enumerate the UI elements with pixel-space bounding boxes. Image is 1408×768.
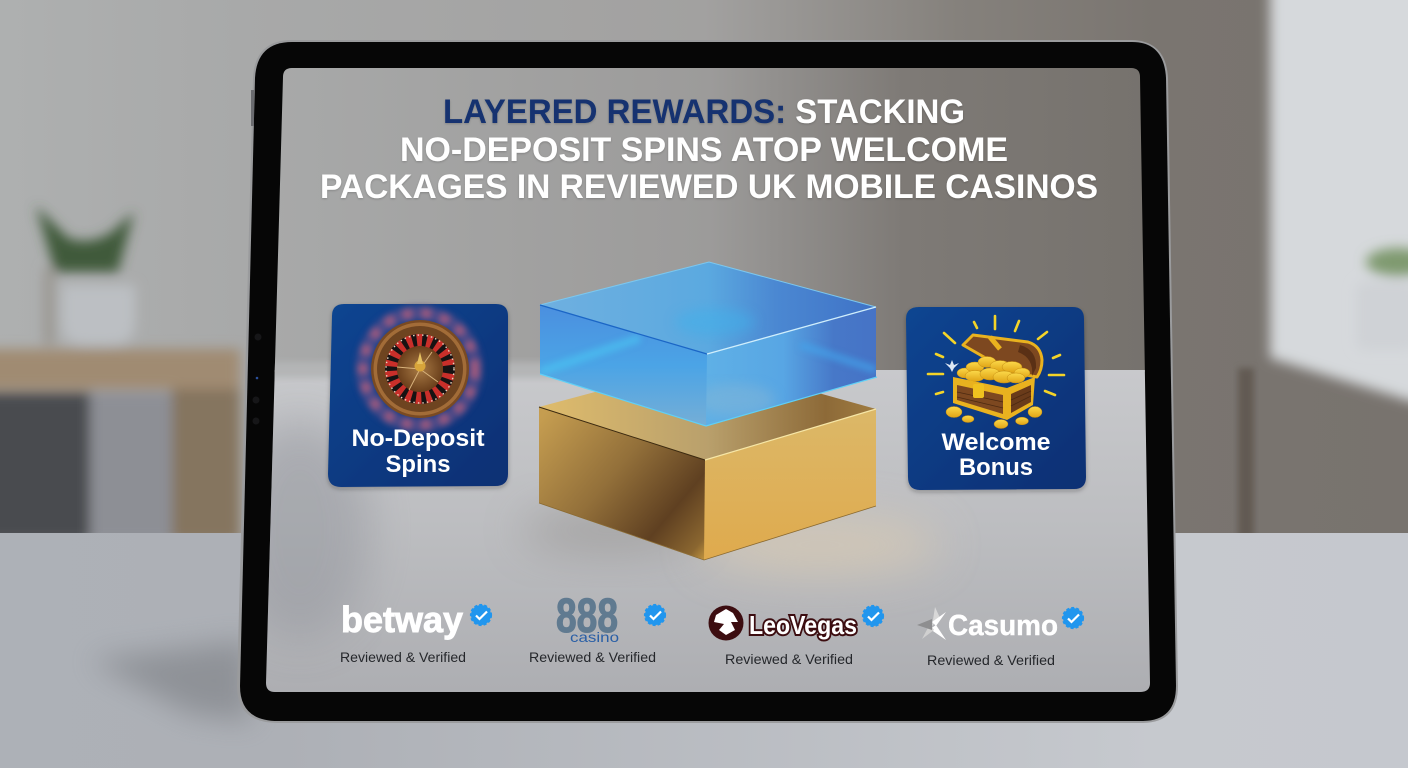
card label — [352, 425, 484, 478]
right plant — [1360, 240, 1408, 286]
brand: Casumo: Casumo — [948, 610, 1058, 642]
title — [320, 93, 1098, 206]
title: NO-DEPOSIT SPINS ATOP WELCOME — [400, 131, 1008, 169]
brand: Casumo — [917, 607, 1083, 668]
title: PACKAGES IN REVIEWED UK MOBILE CASINOS — [320, 168, 1098, 206]
translucent blue block — [540, 262, 877, 426]
card: no-deposit spins — [328, 304, 508, 487]
brand: LeoVegas — [708, 606, 883, 667]
card label: Spins — [386, 451, 450, 478]
brand: LeoVegas: Reviewed & Verified — [725, 652, 853, 667]
brand: 888 casino: casino — [570, 629, 619, 645]
gold base block — [539, 362, 876, 560]
brand: betway: Reviewed & Verified — [340, 650, 466, 665]
brand: betway: betway — [341, 599, 463, 640]
icon: treasure chest — [928, 316, 1064, 428]
brand: 888 casino: 888 — [556, 590, 618, 643]
title: LAYERED REWARDS: STACKING — [443, 93, 965, 131]
table surface — [0, 533, 1408, 768]
blurred room background — [0, 0, 1408, 542]
brand: betway — [340, 599, 491, 665]
card: welcome bonus — [906, 307, 1086, 490]
card label: No-Deposit — [352, 425, 484, 452]
verified badge — [1063, 608, 1083, 628]
card label — [942, 429, 1050, 481]
brand: Casumo: Reviewed & Verified — [927, 653, 1055, 668]
verified badge — [645, 605, 665, 625]
icon: casumo star — [917, 607, 946, 640]
side button — [251, 90, 254, 126]
icon: roulette wheel — [363, 313, 475, 425]
brand: 888 casino — [529, 590, 665, 665]
verified badge — [863, 606, 883, 626]
tablet device — [230, 40, 1178, 723]
brand: 888 casino: Reviewed & Verified — [529, 650, 656, 665]
card label: Bonus — [959, 454, 1033, 481]
left shelf and plant — [0, 206, 240, 542]
card label: Welcome — [942, 429, 1050, 456]
right post — [1238, 368, 1254, 538]
icon: lion emblem — [708, 606, 744, 640]
right window panel — [1270, 0, 1408, 410]
verified badge — [471, 605, 491, 625]
brand: LeoVegas: LeoVegas — [749, 610, 857, 640]
tablet screen — [230, 60, 1160, 700]
camera and side dots — [252, 334, 262, 424]
diagram: stacked reward layers — [539, 262, 877, 560]
